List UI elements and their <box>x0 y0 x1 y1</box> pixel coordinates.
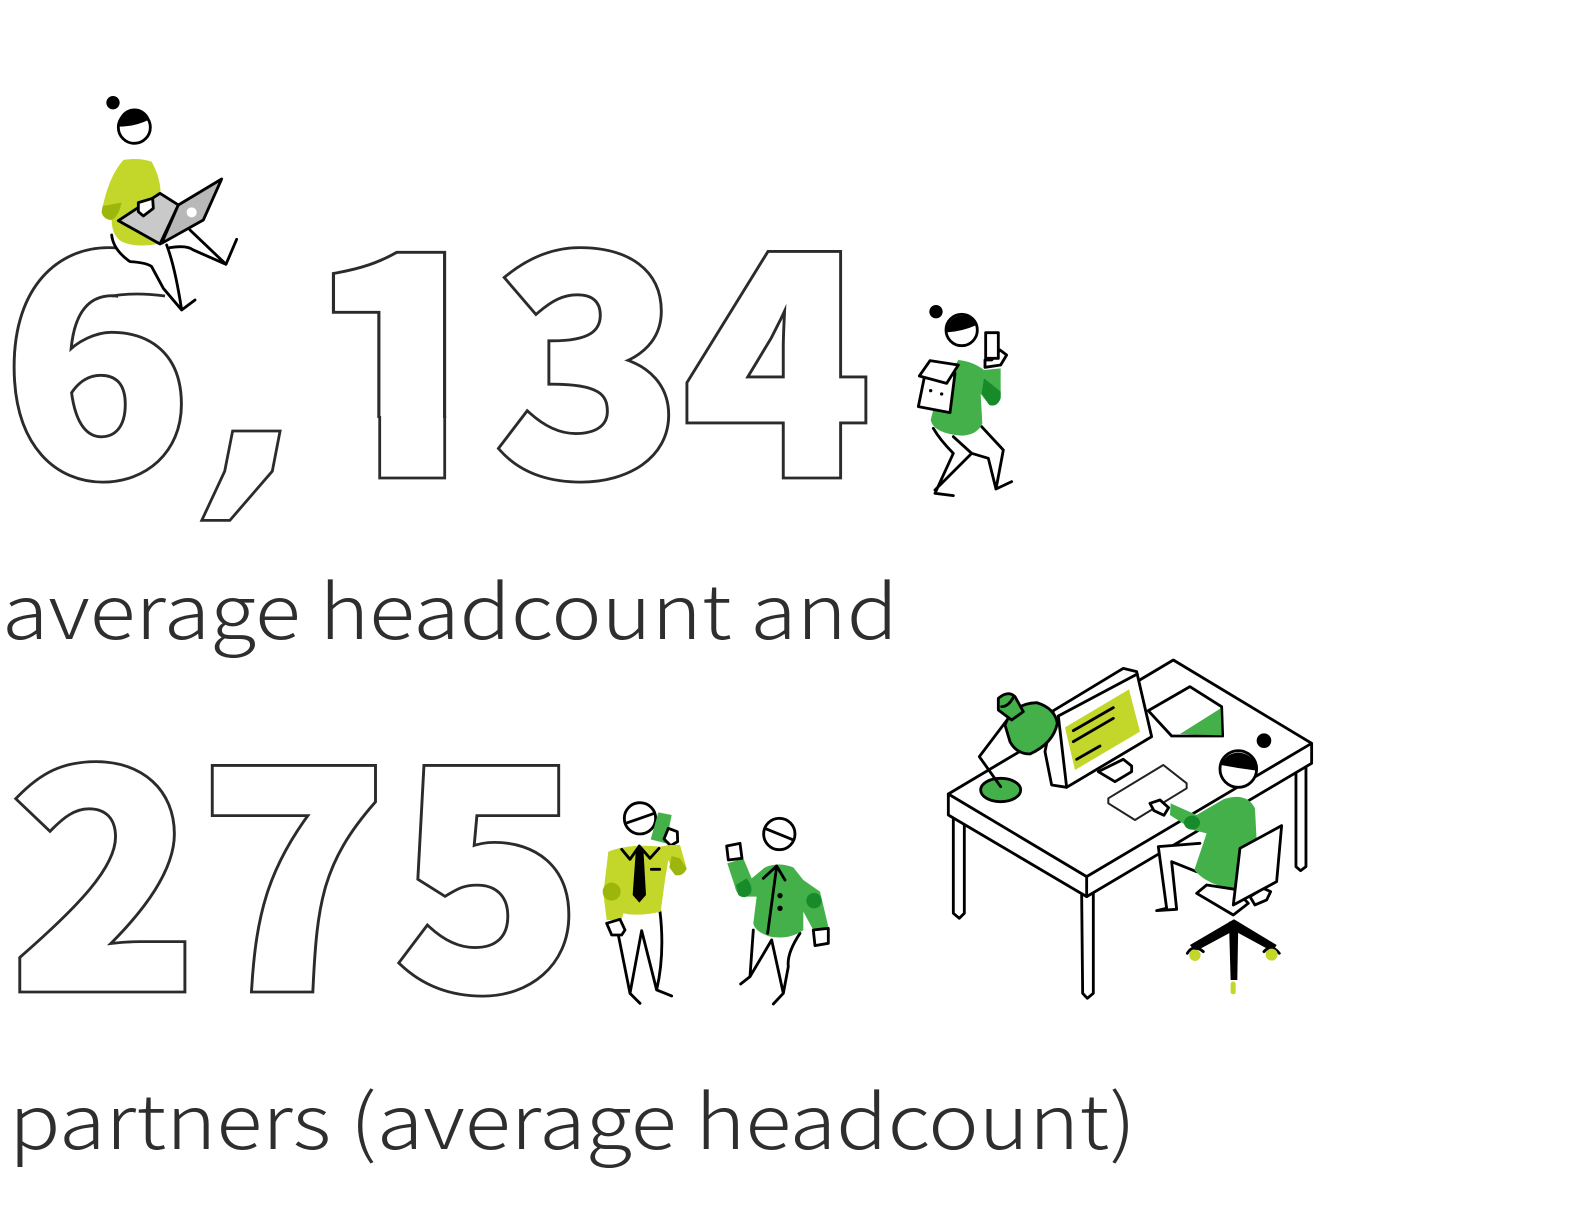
big number: 6,134: 634 <box>3 132 871 560</box>
icon: man in tie on the phone <box>603 803 687 1003</box>
big number: 275: 275 <box>10 646 583 1074</box>
big number: 6,134: 1 <box>304 125 506 563</box>
icon: walking person with backpack and phone <box>918 305 1012 496</box>
icon: person working at a desk with lamp and computer <box>948 660 1312 998</box>
desk items: folder <box>1148 687 1223 736</box>
big number: 6,134: 634 <box>3 132 871 560</box>
icon: person sitting with laptop on the digit 6 <box>102 96 237 310</box>
label: average headcount and: average headcount and <box>2 552 898 661</box>
keyboard <box>1108 765 1187 820</box>
desk items: lamp <box>979 694 1057 802</box>
label: partners (average headcount): partners (average headcount) <box>9 1062 1136 1171</box>
big number: 6,134: , <box>198 231 314 546</box>
seated person <box>1150 751 1257 911</box>
icon: man in green shirt waving <box>727 818 828 1004</box>
desk items: monitor <box>1045 668 1152 787</box>
big number: 275: 275 <box>10 646 583 1074</box>
big number: 6,134: 1 <box>304 125 506 563</box>
office chair <box>1187 826 1282 994</box>
